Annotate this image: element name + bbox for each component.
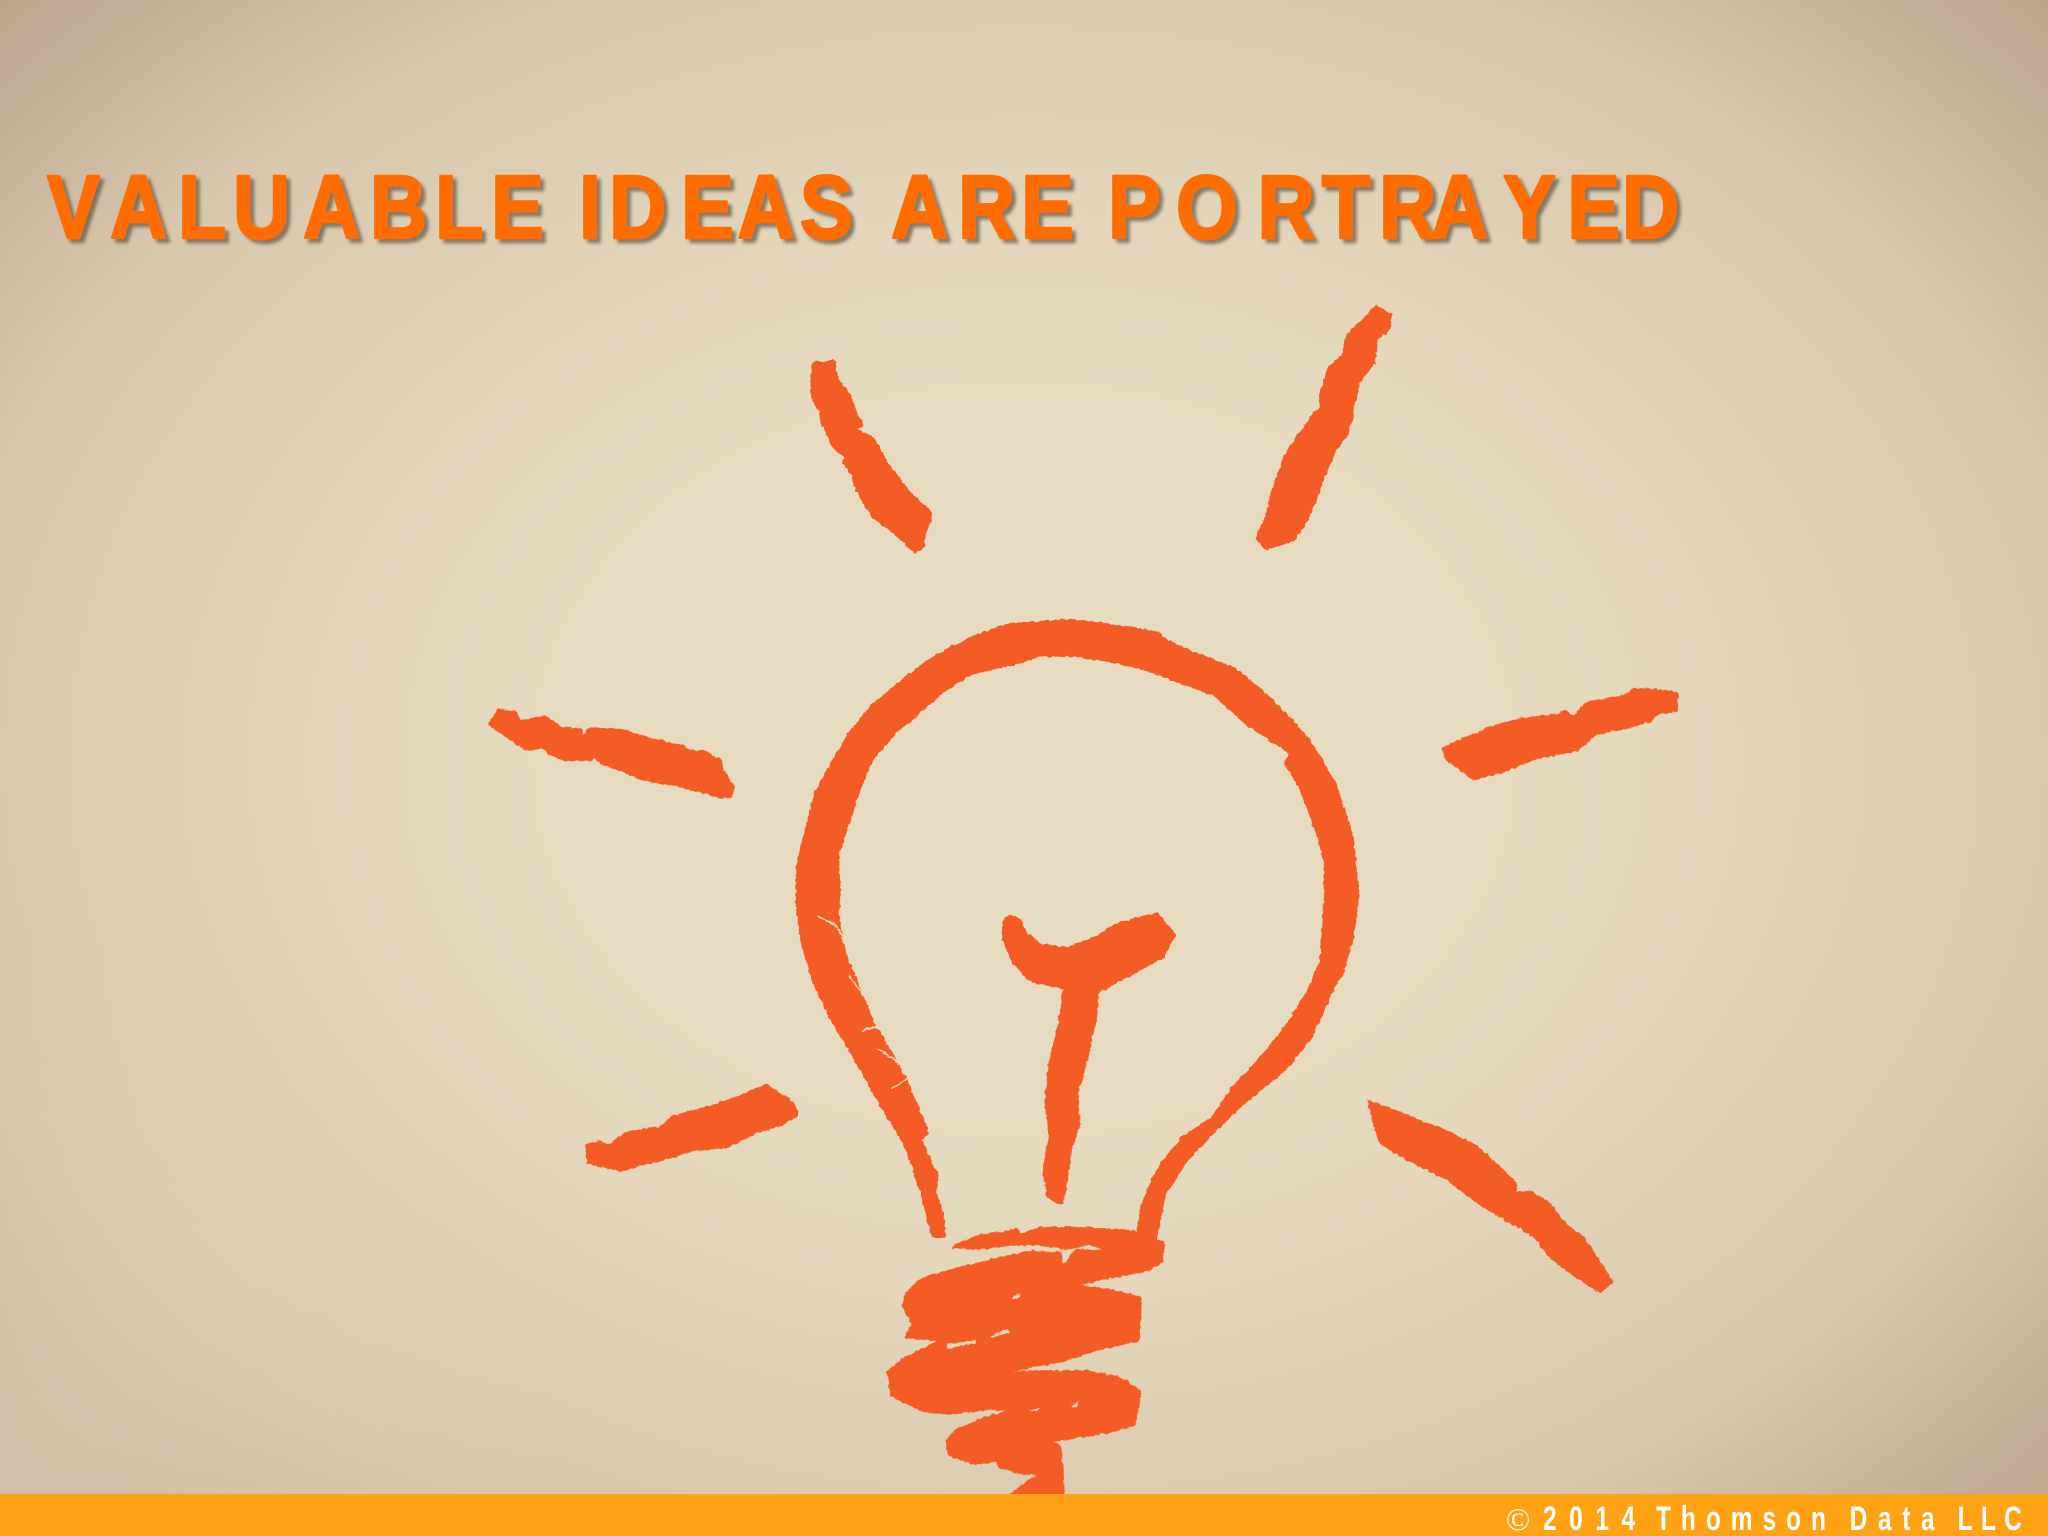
ray: lower left (587, 1085, 797, 1170)
copyright text (1506, 1500, 2022, 1536)
light bulb illustration with rays (489, 307, 1677, 1495)
title: VALUABLE (47, 156, 544, 257)
bulb glass outline (797, 620, 1358, 1249)
ray: lower right (1369, 1102, 1612, 1292)
title: ARE (891, 156, 1074, 257)
title: PORTRAYED (1108, 156, 1679, 257)
title (47, 156, 1679, 257)
ray: top right (1257, 307, 1390, 548)
title: IDEAS (579, 156, 853, 257)
ray: top left (812, 362, 932, 552)
ray: left (489, 710, 733, 797)
bulb screw base (888, 1228, 1163, 1495)
ray: right (1443, 689, 1677, 778)
copyright text: © (1506, 1501, 1530, 1536)
bulb filament (1004, 914, 1174, 1203)
footer bar (0, 1494, 2048, 1536)
